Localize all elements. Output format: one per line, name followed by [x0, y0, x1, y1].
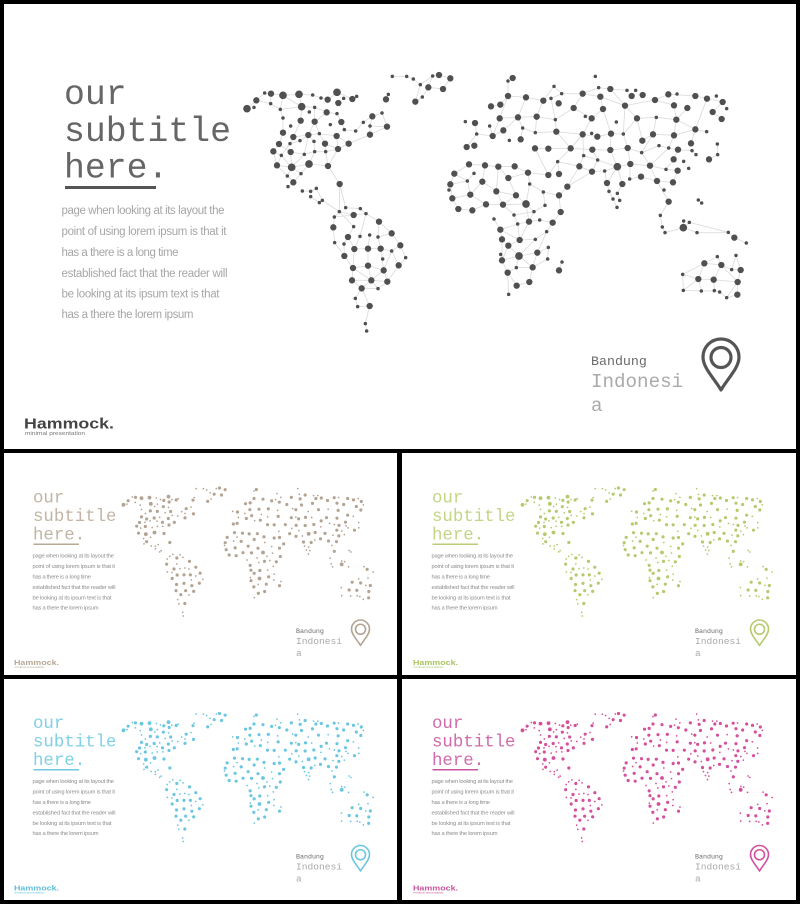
logo [24, 416, 114, 437]
body text: established fact that the reader will [32, 810, 116, 816]
body text: established fact that the reader will [432, 585, 514, 591]
world network map [247, 75, 746, 331]
body text: point of using lorem ipsum is that it [62, 226, 227, 238]
heading: here. [432, 752, 484, 771]
body text: point of using lorem ipsum is that it [432, 564, 514, 570]
logo [14, 883, 59, 894]
location label: Indonesi [695, 636, 741, 647]
panel: main dark grey slide [4, 4, 796, 449]
body text: page when looking at its layout the [432, 554, 513, 560]
heading: here. [64, 150, 168, 188]
world network map [123, 488, 373, 616]
body text: be looking at its ipsum text is that [432, 595, 511, 601]
heading underline [432, 769, 478, 770]
logo: minimal presentation [414, 666, 444, 669]
slide content [14, 488, 373, 669]
heading underline [432, 544, 478, 545]
location label: a [591, 395, 603, 417]
body text: established fact that the reader will [62, 268, 228, 280]
location label: Indonesi [296, 862, 342, 872]
location label: a [695, 648, 701, 659]
heading: here. [33, 752, 85, 771]
logo [413, 883, 458, 894]
heading: subtitle [64, 113, 231, 152]
body text: be looking at its ipsum text is that [432, 821, 511, 827]
panel: tan slide [4, 453, 397, 675]
body text: has a there the lorem ipsum [32, 831, 99, 837]
body text: be looking at its ipsum text is that [62, 288, 220, 300]
panel background [4, 679, 397, 900]
panel: green slide [402, 453, 796, 675]
location label: Indonesi [296, 636, 342, 647]
location label: a [695, 874, 701, 884]
logo: minimal presentation [14, 892, 45, 894]
location label: Indonesi [591, 371, 683, 393]
panel: blue slide [4, 679, 397, 900]
panel background [4, 4, 796, 449]
body text: has a there is a long time [62, 247, 178, 259]
heading: subtitle [432, 734, 516, 752]
heading: here. [432, 526, 484, 545]
heading: our [33, 490, 64, 508]
body text: page when looking at its layout the [62, 205, 224, 217]
location label: Bandung [591, 354, 647, 369]
location label: Indonesi [695, 862, 741, 872]
heading underline [34, 769, 79, 770]
world network map [522, 713, 772, 841]
body text: has a there the lorem ipsum [62, 309, 194, 321]
logo: minimal presentation [414, 892, 444, 894]
logo: Hammock. [14, 883, 59, 892]
body text: be looking at its ipsum text is that [32, 595, 112, 601]
heading: our [432, 715, 463, 734]
logo: minimal presentation [14, 666, 45, 669]
body text: point of using lorem ipsum is that it [432, 790, 514, 796]
location label: Bandung [695, 627, 723, 635]
heading underline [34, 544, 79, 545]
logo: Hammock. [413, 658, 458, 667]
icon: location pin [703, 339, 739, 390]
body text: point of using lorem ipsum is that it [32, 790, 115, 796]
icon: location pin [750, 846, 768, 871]
body text: established fact that the reader will [32, 585, 116, 591]
heading underline [65, 186, 156, 189]
body text: be looking at its ipsum text is that [32, 821, 112, 827]
logo: Hammock. [14, 658, 59, 667]
panel background [4, 453, 397, 675]
location label: Bandung [296, 852, 324, 860]
heading: here. [33, 526, 85, 545]
body text: page when looking at its layout the [432, 779, 513, 785]
slide content [413, 488, 772, 669]
body text: established fact that the reader will [432, 810, 514, 816]
body text: page when looking at its layout the [32, 779, 114, 785]
panel background [402, 453, 796, 675]
heading: subtitle [33, 734, 116, 752]
heading: our [33, 715, 64, 734]
body text: page when looking at its layout the [32, 554, 114, 560]
heading: our [64, 76, 127, 115]
heading: subtitle [432, 508, 516, 527]
location label: a [296, 874, 302, 884]
body text: point of using lorem ipsum is that it [32, 564, 115, 570]
panel background [402, 679, 796, 900]
body text: has a there is a long time [432, 574, 490, 580]
logo: minimal presentation [25, 431, 85, 437]
body text: has a there the lorem ipsum [432, 831, 498, 837]
logo [413, 658, 458, 669]
body text: has a there is a long time [32, 574, 91, 580]
slide content [413, 713, 772, 894]
icon: location pin [352, 846, 370, 871]
body text: has a there the lorem ipsum [32, 606, 99, 612]
body text: has a there is a long time [432, 800, 490, 806]
slide content [14, 713, 373, 894]
heading: subtitle [33, 508, 116, 527]
logo: Hammock. [24, 416, 114, 432]
icon: location pin [750, 620, 768, 646]
logo: Hammock. [413, 883, 458, 892]
location label: a [296, 648, 302, 659]
body text: has a there is a long time [32, 800, 91, 806]
logo [14, 658, 59, 669]
heading: our [432, 490, 463, 508]
panel: pink slide [402, 679, 796, 900]
body text: has a there the lorem ipsum [432, 606, 498, 612]
world network map [522, 488, 772, 616]
location label: Bandung [296, 627, 324, 635]
world network map [123, 713, 373, 841]
icon: location pin [352, 620, 370, 646]
location label: Bandung [695, 852, 723, 860]
